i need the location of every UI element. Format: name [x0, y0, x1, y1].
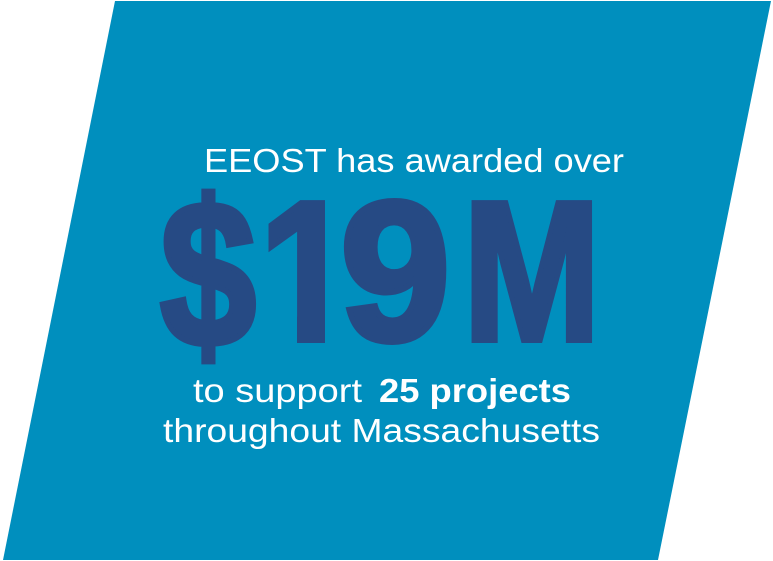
big number: $19M: M — [463, 159, 601, 382]
big number: $19M — [159, 188, 592, 364]
big number: $19M: 9 — [340, 161, 451, 383]
text: EEOST has awarded over: EEOST has awarded over — [204, 143, 624, 180]
big number: $19M: 1 — [259, 160, 356, 383]
text: to support 25 projects — [193, 373, 571, 410]
text: to support 25 projects: to support — [193, 373, 363, 410]
text: throughout Massachusetts: throughout Massachusetts — [163, 413, 600, 450]
big number: $19M: $ — [160, 158, 256, 391]
text: to support 25 projects: 25 projects — [379, 373, 571, 410]
